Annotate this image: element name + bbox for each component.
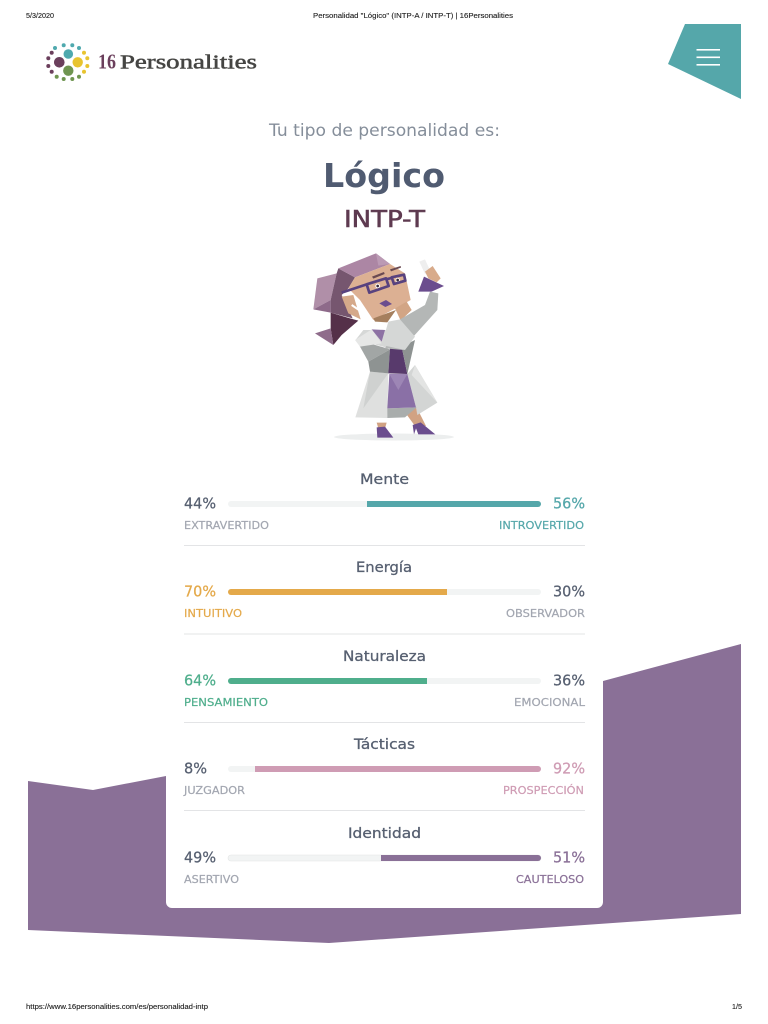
head, hair and raised arm	[313, 253, 444, 350]
scale: Tácticas: 8%	[184, 760, 207, 778]
browser print header	[26, 13, 514, 20]
scale: Tácticas: 92%	[553, 760, 585, 778]
scale: Mente: 56%	[553, 494, 585, 512]
scale: Tácticas: Tácticas	[353, 737, 415, 753]
scale: Identidad: 49%	[184, 848, 216, 866]
scale: Naturaleza: EMOCIONAL	[514, 697, 585, 709]
scale: Identidad: Identidad	[348, 826, 421, 842]
scale: Mente: Mente	[360, 472, 409, 488]
scale: Naturaleza: PENSAMIENTO	[184, 697, 268, 709]
illustration: logician scientist with flask	[313, 253, 454, 440]
browser print header: 5/3/2020	[26, 13, 54, 20]
menu button	[668, 24, 741, 99]
lower body	[355, 330, 437, 438]
scale: Identidad: 51%	[553, 848, 585, 866]
browser print footer	[26, 1004, 742, 1011]
browser print footer: https://www.16personalities.com/es/personalidad-intp	[26, 1004, 208, 1011]
scale: Energía: OBSERVADOR	[506, 608, 585, 620]
scale: Naturaleza: 36%	[553, 672, 585, 690]
scale: Energía: 70%	[184, 582, 216, 600]
figure shadow	[334, 434, 454, 440]
scale: Energía: 30%	[553, 582, 585, 600]
scale: Identidad: ASERTIVO	[184, 874, 239, 886]
scale: Tácticas: JUZGADOR	[183, 785, 245, 797]
scale: Mente: EXTRAVERTIDO	[184, 520, 269, 532]
background shape	[28, 644, 741, 943]
scale: Naturaleza	[184, 649, 585, 709]
scale: Energía: Energía	[356, 560, 412, 576]
scale: Identidad	[184, 826, 585, 886]
browser print footer: 1/5	[732, 1004, 742, 1011]
results card	[166, 445, 603, 908]
scale: Identidad: CAUTELOSO	[516, 874, 584, 886]
scale: Energía	[184, 560, 585, 620]
browser print header: Personalidad "Lógico" (INTP-A / INTP-T) | 16Personalities	[313, 13, 514, 20]
scale: Mente: INTROVERTIDO	[499, 520, 584, 532]
scale: Tácticas: PROSPECCIÓN	[503, 784, 584, 797]
type code: INTP-T	[344, 207, 426, 233]
scale: Mente: 44%	[184, 494, 216, 512]
scale: Mente	[184, 472, 585, 532]
scale: Naturaleza: Naturaleza	[343, 649, 426, 665]
title: Lógico	[323, 156, 445, 195]
logo: 16 Personalities	[46, 43, 257, 81]
subtitle: Tu tipo de personalidad es:	[268, 121, 500, 140]
scale: Energía: INTUITIVO	[184, 608, 242, 620]
scale: Tácticas	[183, 737, 585, 797]
logo: 16 Personalities: Personalities	[120, 52, 257, 74]
logo: 16 Personalities: 16	[98, 50, 116, 74]
scale: Naturaleza: 64%	[184, 672, 216, 690]
